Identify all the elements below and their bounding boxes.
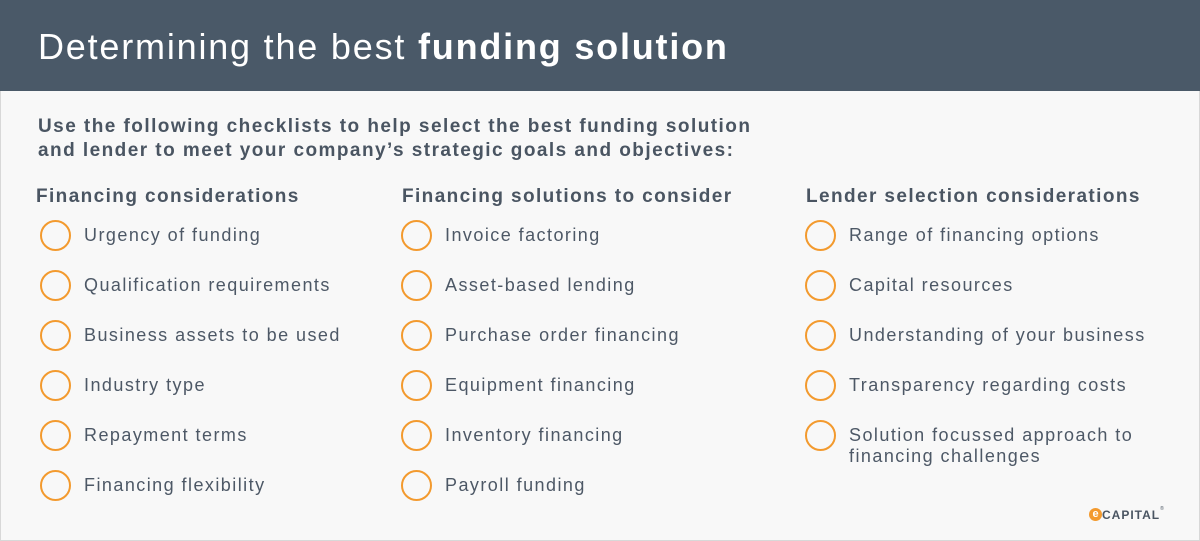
list: financing solutions xyxy=(401,220,680,501)
item xyxy=(805,320,1146,351)
list: lender selection: Understanding of your business xyxy=(849,325,1146,345)
list: financing considerations: Qualification requirements xyxy=(84,275,331,295)
list: lender selection: Solution focussed approach to xyxy=(849,425,1133,445)
list: financing solutions: Equipment financing xyxy=(445,375,636,395)
list: lender selection: Capital resources xyxy=(849,275,1014,295)
list: lender selection: Range of financing options xyxy=(849,225,1100,245)
list: financing solutions: Invoice factoring xyxy=(445,225,601,245)
heading: financing considerations: Financing considerations xyxy=(36,186,300,207)
item xyxy=(40,420,248,451)
item xyxy=(401,420,624,451)
item xyxy=(40,270,331,301)
list: lender selection: Transparency regarding costs xyxy=(849,375,1127,395)
list: financing solutions: Purchase order financing xyxy=(445,325,680,345)
intro text xyxy=(38,116,751,161)
item xyxy=(805,220,1100,251)
item xyxy=(805,270,1014,301)
intro text: and lender to meet your company’s strategic goals and objectives: xyxy=(38,140,734,161)
item xyxy=(40,220,261,251)
list: lender selection xyxy=(805,220,1146,466)
item xyxy=(401,220,601,251)
item xyxy=(40,470,266,501)
list: financing considerations: Business assets to be used xyxy=(84,325,341,345)
heading: lender selection: Lender selection considerations xyxy=(806,186,1141,207)
intro text: Use the following checklists to help select the best funding solution xyxy=(38,116,751,137)
list: financing solutions: Payroll funding xyxy=(445,475,586,495)
list: financing solutions: Inventory financing xyxy=(445,425,624,445)
list: financing solutions: Asset-based lending xyxy=(445,275,636,295)
item xyxy=(805,370,1127,401)
item xyxy=(40,320,341,351)
item xyxy=(401,370,636,401)
list: financing considerations xyxy=(40,220,341,501)
item xyxy=(401,320,680,351)
item xyxy=(805,420,1133,466)
header bar xyxy=(0,0,1200,91)
logo: eCapital: e xyxy=(1092,508,1099,520)
item xyxy=(401,270,636,301)
heading: financing solutions: Financing solutions to consider xyxy=(402,186,733,207)
logo: eCapital: CAPITAL® xyxy=(1102,506,1164,522)
item xyxy=(40,370,206,401)
title: Determining the best funding solution xyxy=(38,26,729,67)
list: financing considerations: Industry type xyxy=(84,375,206,395)
list: financing considerations: Financing flexibility xyxy=(84,475,266,495)
item xyxy=(401,470,586,501)
list: financing considerations: Repayment terms xyxy=(84,425,248,445)
list: lender selection: financing challenges xyxy=(849,446,1041,466)
list: financing considerations: Urgency of funding xyxy=(84,225,261,245)
